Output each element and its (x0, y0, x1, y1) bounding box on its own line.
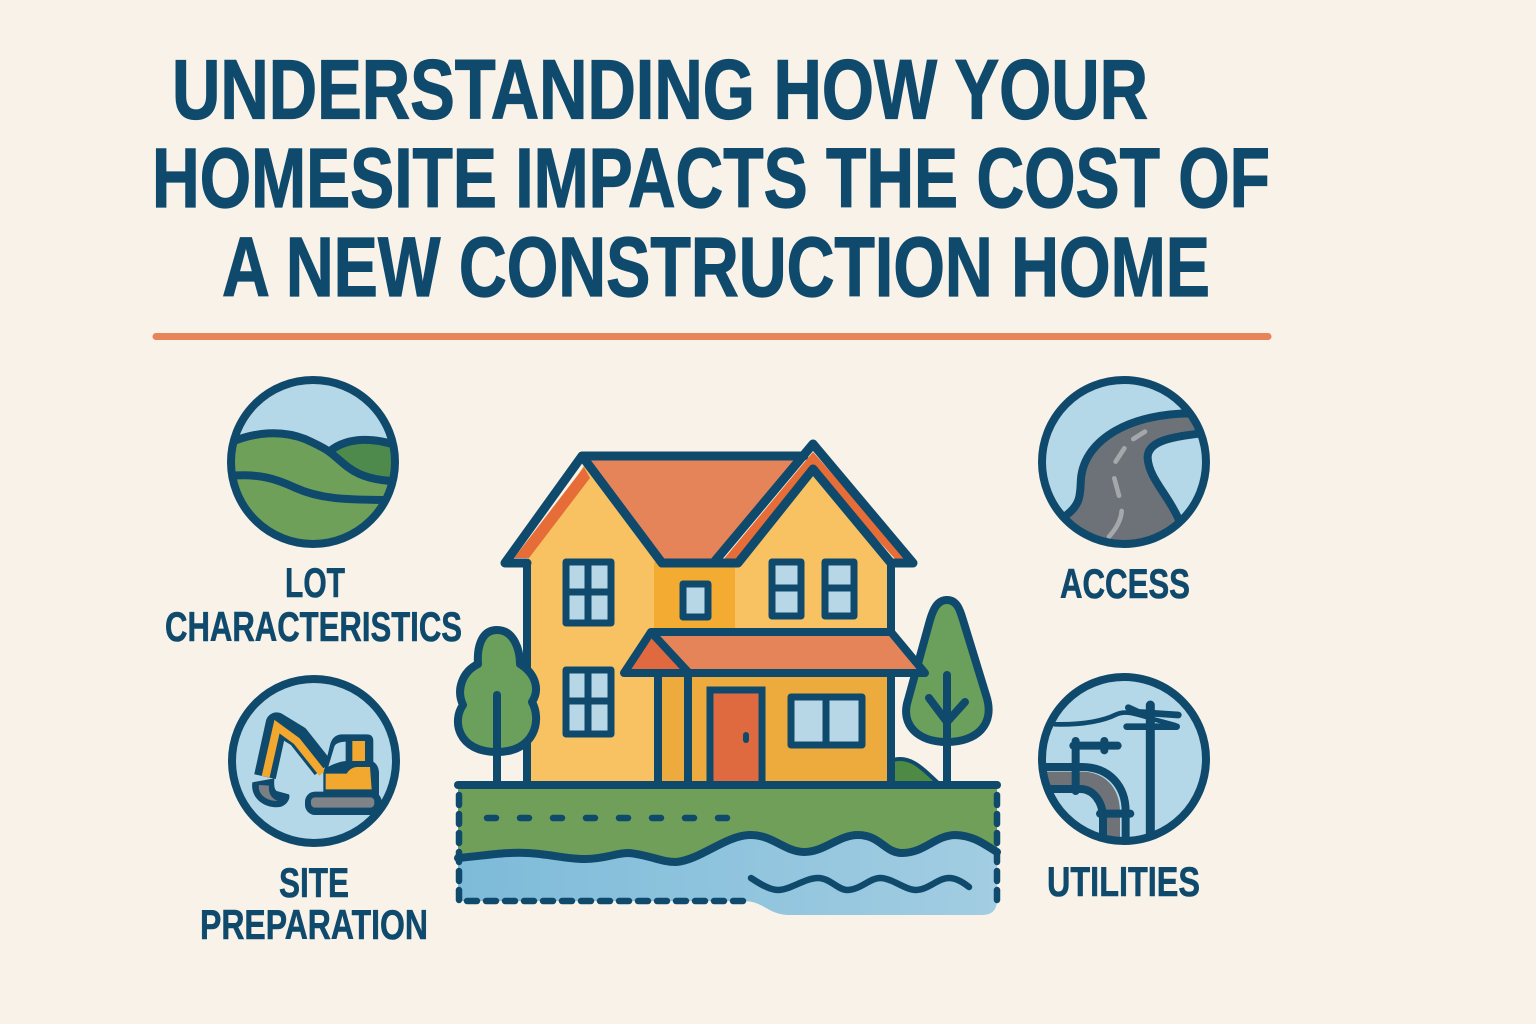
house wall outlines (527, 563, 891, 785)
label: site preparation (200, 859, 428, 948)
label: lot characteristics: LOT (285, 559, 345, 606)
right roof edge (723, 452, 908, 560)
label: lot characteristics (165, 559, 462, 650)
window: upper right one (772, 562, 801, 616)
title: UNDERSTANDING HOW YOUR (172, 42, 1148, 136)
lot boundary dashes (459, 795, 997, 901)
label: utilities: UTILITIES (1047, 858, 1200, 905)
label: lot characteristics: CHARACTERISTICS (165, 603, 462, 650)
title underline (156, 333, 1268, 340)
ground line (458, 781, 997, 789)
house illustration (458, 444, 997, 915)
porch posts (658, 673, 688, 785)
dashed path (487, 815, 730, 821)
window: upper right two (825, 562, 854, 616)
window: front (791, 697, 862, 745)
water (458, 835, 997, 915)
window: centre (683, 584, 708, 617)
label: site preparation: SITE (279, 859, 349, 906)
shoreline (458, 835, 997, 862)
title: A NEW CONSTRUCTION HOME (222, 220, 1210, 314)
label: site preparation: PREPARATION (200, 901, 428, 948)
roof outline (505, 444, 913, 563)
icon: utilities (1042, 677, 1206, 845)
left tree (458, 630, 536, 785)
porch roof (624, 632, 925, 673)
label: access: ACCESS (1060, 560, 1190, 607)
window: lower left (566, 670, 611, 734)
icon: lot characteristics hills (228, 380, 405, 552)
icon: access road (1042, 380, 1206, 552)
centre wall (654, 562, 735, 628)
main roof (582, 456, 806, 562)
water ripple (751, 878, 969, 890)
left roof edge (514, 467, 590, 558)
ground (458, 785, 997, 862)
door (710, 690, 762, 785)
right tree (906, 600, 989, 785)
window: upper left (566, 562, 611, 623)
house walls (527, 465, 891, 785)
icon: site preparation excavator (232, 679, 396, 843)
title (152, 42, 1270, 314)
bush (893, 759, 938, 783)
front wall (660, 673, 891, 785)
title: HOMESITE IMPACTS THE COST OF (152, 131, 1270, 225)
